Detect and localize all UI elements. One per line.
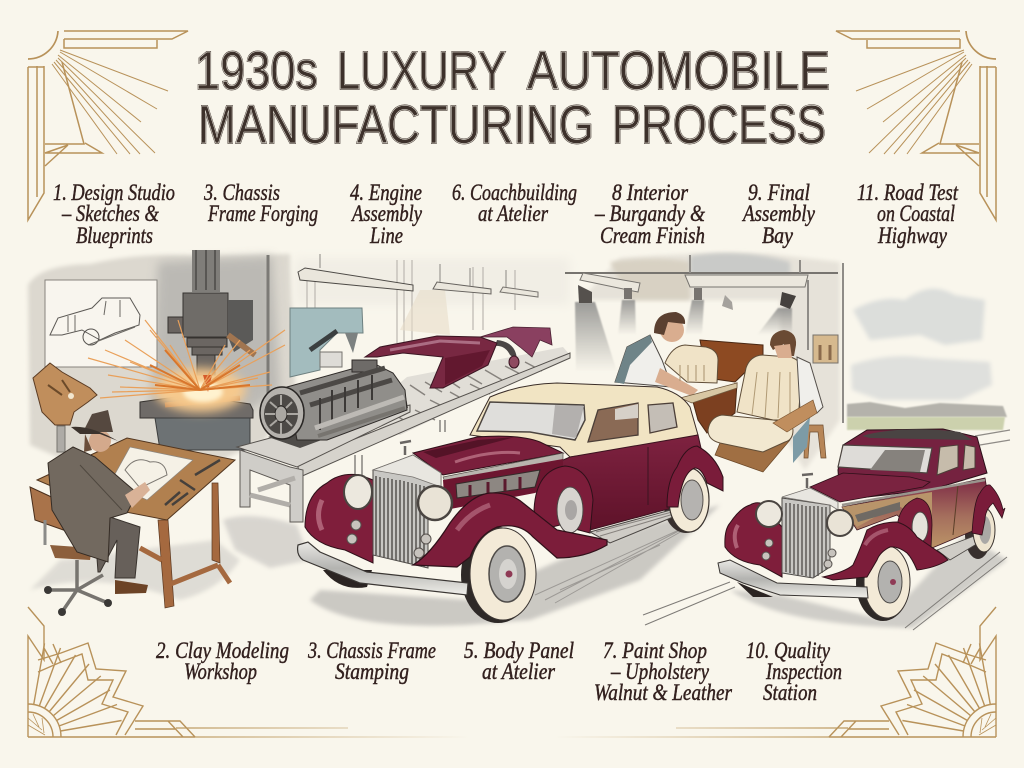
second car: burgundy and tan on coastal road [718, 429, 1005, 621]
carved clay model on stand [33, 363, 97, 452]
corner ornament: top right [836, 31, 996, 220]
caption: step 5: 5. Body Panel [464, 638, 574, 663]
caption: step 3 forging: Frame Forging [207, 201, 318, 226]
caption: step 4: 4. Engine [350, 180, 422, 205]
coastal clouds, hills and road [643, 289, 1010, 630]
caption: step 3 forging [203, 180, 318, 226]
caption: step 5: at Atelier [482, 659, 556, 684]
title: 1930s [195, 41, 318, 101]
caption: step 8 [594, 180, 705, 248]
main car: burgundy and cream saloon [298, 383, 723, 623]
caption: step 3 stamping [307, 638, 436, 684]
caption: step 8: – Burgandy & [594, 201, 705, 226]
corner ornament: top left [28, 31, 188, 220]
caption: step 1 [53, 180, 175, 248]
title: AUTOMOBILE [527, 41, 830, 101]
caption: step 9: Bay [762, 223, 794, 248]
stamping press [140, 250, 268, 450]
title: 1930s [195, 41, 318, 101]
factory watercolour wash [28, 253, 840, 626]
caption: step 4: Line [369, 223, 403, 248]
upholsterer left [615, 312, 698, 396]
engine on bench [237, 360, 410, 522]
caption: step 1: 1. Design Studio [53, 180, 175, 205]
caption: step 10 [746, 638, 842, 705]
caption: step 11: on Coastal [877, 201, 955, 226]
caption: step 1: – Sketches & [61, 201, 159, 226]
caption: step 10: 10. Quality [746, 638, 831, 663]
top step captions [53, 180, 958, 248]
caption: step 4 [350, 180, 423, 248]
caption: step 6 [452, 180, 577, 226]
title: MANUFACTURING [198, 95, 594, 155]
title [195, 41, 830, 155]
upholsterer right [770, 330, 826, 463]
caption: step 3 stamping: Stamping [335, 659, 409, 684]
overhead tube lights [298, 254, 538, 297]
caption: step 7: 7. Paint Shop [603, 638, 707, 663]
title: PROCESS [612, 95, 826, 155]
office chair [30, 487, 112, 616]
title: PROCESS [612, 95, 826, 155]
caption: step 9: Assembly [741, 201, 816, 226]
drafting table [37, 438, 235, 608]
caption: step 7: Walnut & Leather [594, 680, 733, 705]
conveyor line [297, 347, 570, 477]
caption: step 10: Station [763, 680, 817, 705]
blueprint sketch on wall [45, 280, 157, 367]
title: MANUFACTURING [198, 95, 594, 155]
title: AUTOMOBILE [527, 41, 830, 101]
caption: step 2 [156, 638, 289, 684]
corner ornament: bottom left [28, 607, 470, 737]
caption: step 4: Assembly [350, 201, 423, 226]
sparks [88, 320, 285, 412]
bottom step captions [156, 638, 842, 705]
caption: step 7: – Upholstery [610, 659, 710, 684]
interior ceiling rig and spray lamps [565, 255, 843, 423]
caption: step 6: 6. Coachbuilding [452, 180, 577, 205]
caption: step 11: Highway [877, 223, 948, 248]
title: LUXURY [337, 41, 506, 101]
caption: step 9: 9. Final [748, 180, 810, 205]
corner ornament: bottom right [554, 607, 996, 737]
caption: step 6: at Atelier [478, 201, 549, 226]
caption: step 5 [464, 638, 574, 684]
caption: step 1: Blueprints [76, 223, 153, 248]
caption: step 3 stamping: 3. Chassis Frame [307, 638, 436, 663]
caption: step 2: 2. Clay Modeling [156, 638, 289, 663]
car roof panels on conveyor [365, 327, 552, 388]
designer figure [48, 410, 150, 594]
caption: step 8: Cream Finish [600, 223, 705, 248]
caption: step 8: 8 Interior [612, 180, 689, 205]
caption: step 11 [857, 180, 958, 248]
caption: step 3 forging: 3. Chassis [203, 180, 280, 205]
caption: step 9 [741, 180, 816, 248]
teal milling machine [290, 308, 363, 377]
title: LUXURY [337, 41, 506, 101]
caption: step 11: 11. Road Test [857, 180, 958, 205]
caption: step 7 [594, 638, 733, 705]
caption: step 10: Inspection [765, 659, 842, 684]
caption: step 2: Workshop [184, 659, 257, 684]
walnut cabinet and seats [665, 340, 802, 472]
